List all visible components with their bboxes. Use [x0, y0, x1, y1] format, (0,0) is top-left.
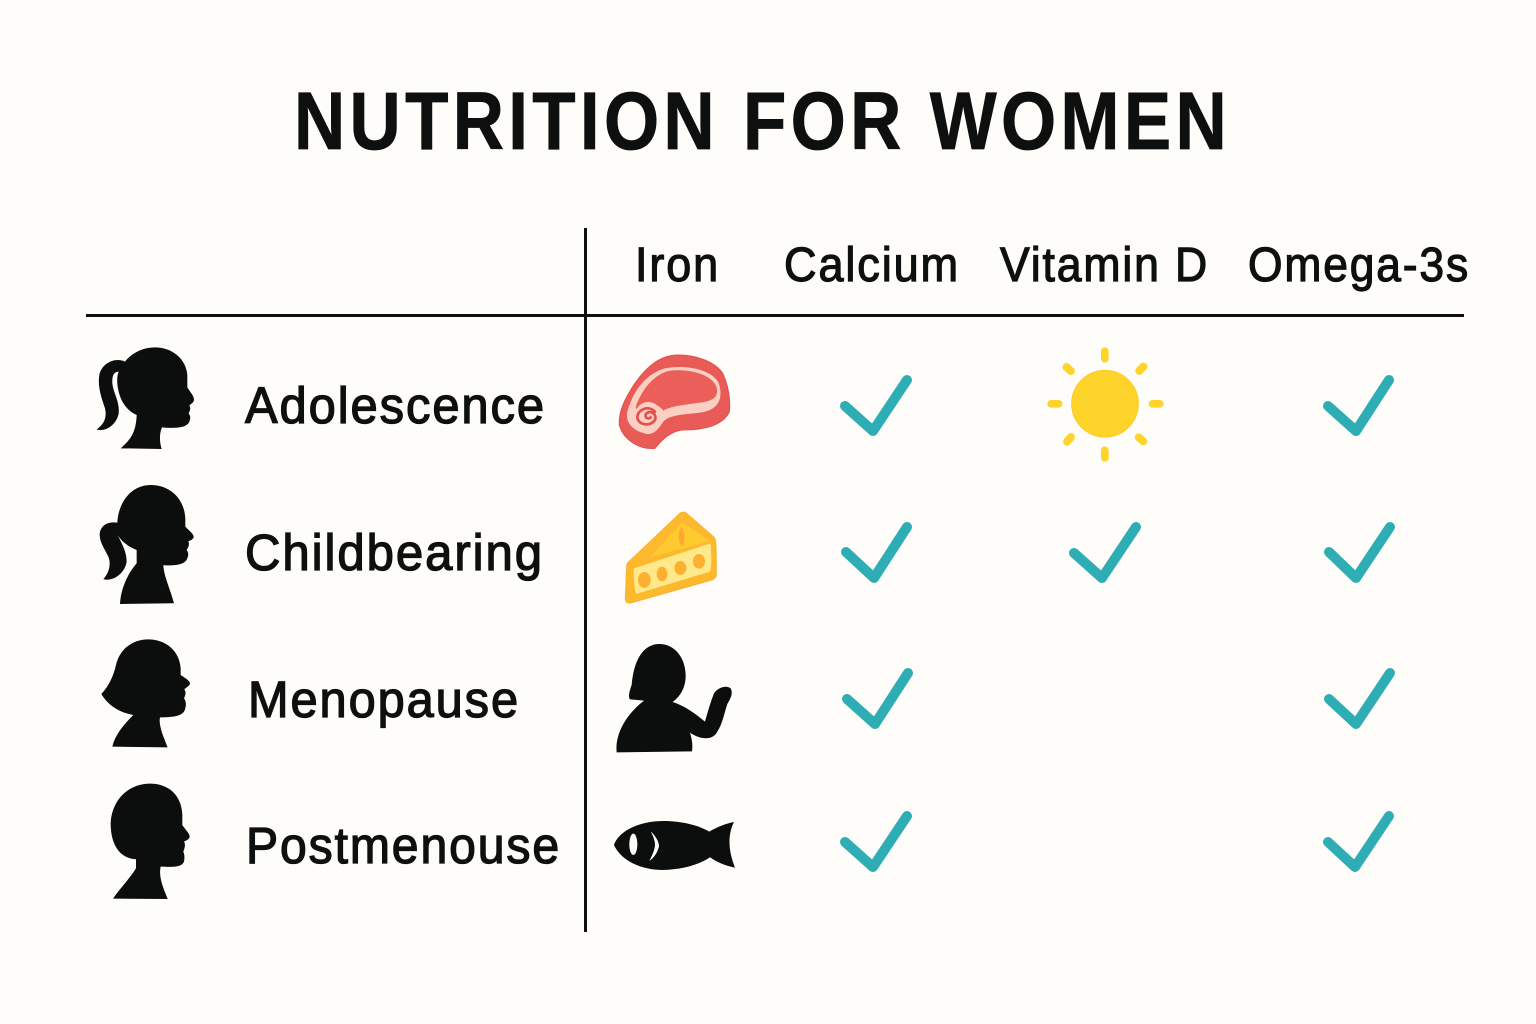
- icon: fish: [614, 821, 735, 870]
- check: adolescence omega-3s: [1328, 380, 1389, 431]
- icon: childbearing silhouette: [100, 485, 194, 604]
- check: menopause calcium: [847, 673, 908, 724]
- row label: Childbearing: Childbearing: [245, 524, 544, 581]
- check: adolescence calcium: [845, 380, 907, 431]
- check: postmenopause omega-3s: [1328, 816, 1389, 867]
- row label: Menopause: Menopause: [248, 671, 520, 728]
- icon: steak: [619, 355, 730, 449]
- column header: Omega-3s: Omega-3s: [1248, 239, 1470, 292]
- row label: Postmenouse: Postmenouse: [246, 817, 561, 874]
- icon: woman waving: [616, 644, 732, 752]
- column header: Calcium: Calcium: [784, 239, 960, 292]
- check: menopause omega-3s: [1329, 673, 1390, 724]
- icon: adolescent silhouette: [97, 347, 194, 449]
- row label: Adolescence: Adolescence: [245, 377, 546, 434]
- icon: sun: [1047, 347, 1164, 462]
- column header: Iron: Iron: [635, 239, 720, 292]
- check: postmenopause calcium: [845, 816, 907, 867]
- icon: cheese: [625, 512, 716, 603]
- title: NUTRITION FOR WOMEN: [294, 76, 1231, 167]
- icon: postmenopause silhouette: [111, 784, 190, 899]
- check: childbearing omega-3s: [1329, 527, 1390, 578]
- icon: menopause silhouette: [101, 639, 190, 747]
- check: childbearing calcium: [846, 527, 907, 578]
- check: childbearing vitamin D: [1074, 527, 1136, 578]
- column header: Vitamin D: Vitamin D: [1000, 239, 1209, 292]
